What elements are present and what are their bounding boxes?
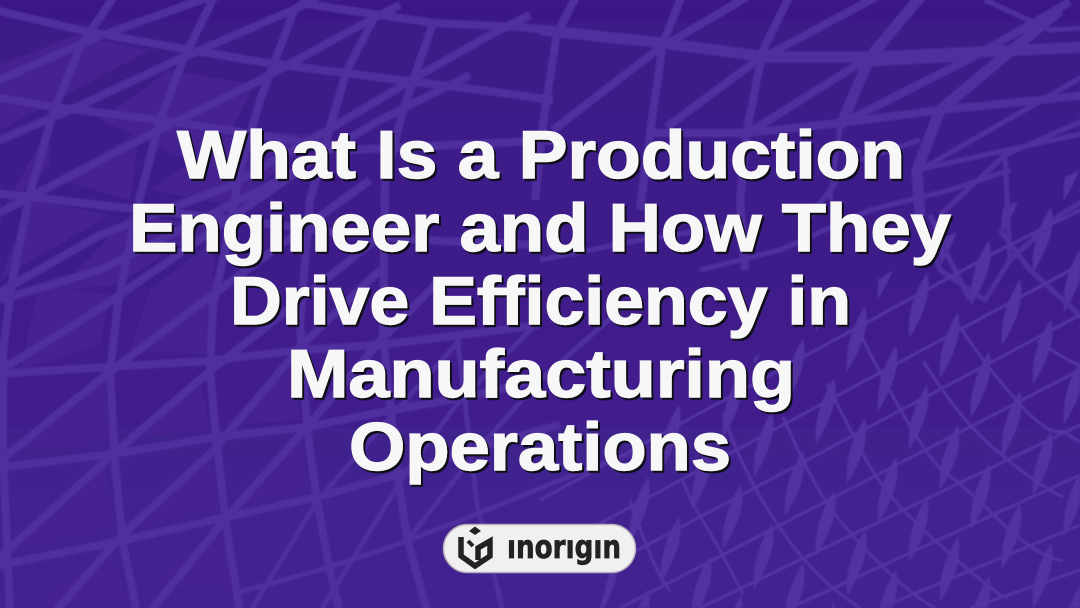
title: Engineer and How They [129,190,951,266]
logo wordmark: inorigin [507,528,621,566]
icon: inorigin hexagon mark [461,526,490,566]
logo pill [444,524,636,572]
title [129,117,951,485]
title: Manufacturing [287,336,795,412]
title: Drive Efficiency in [230,263,851,339]
title: What Is a Production [177,117,905,193]
title: Operations [349,409,731,485]
